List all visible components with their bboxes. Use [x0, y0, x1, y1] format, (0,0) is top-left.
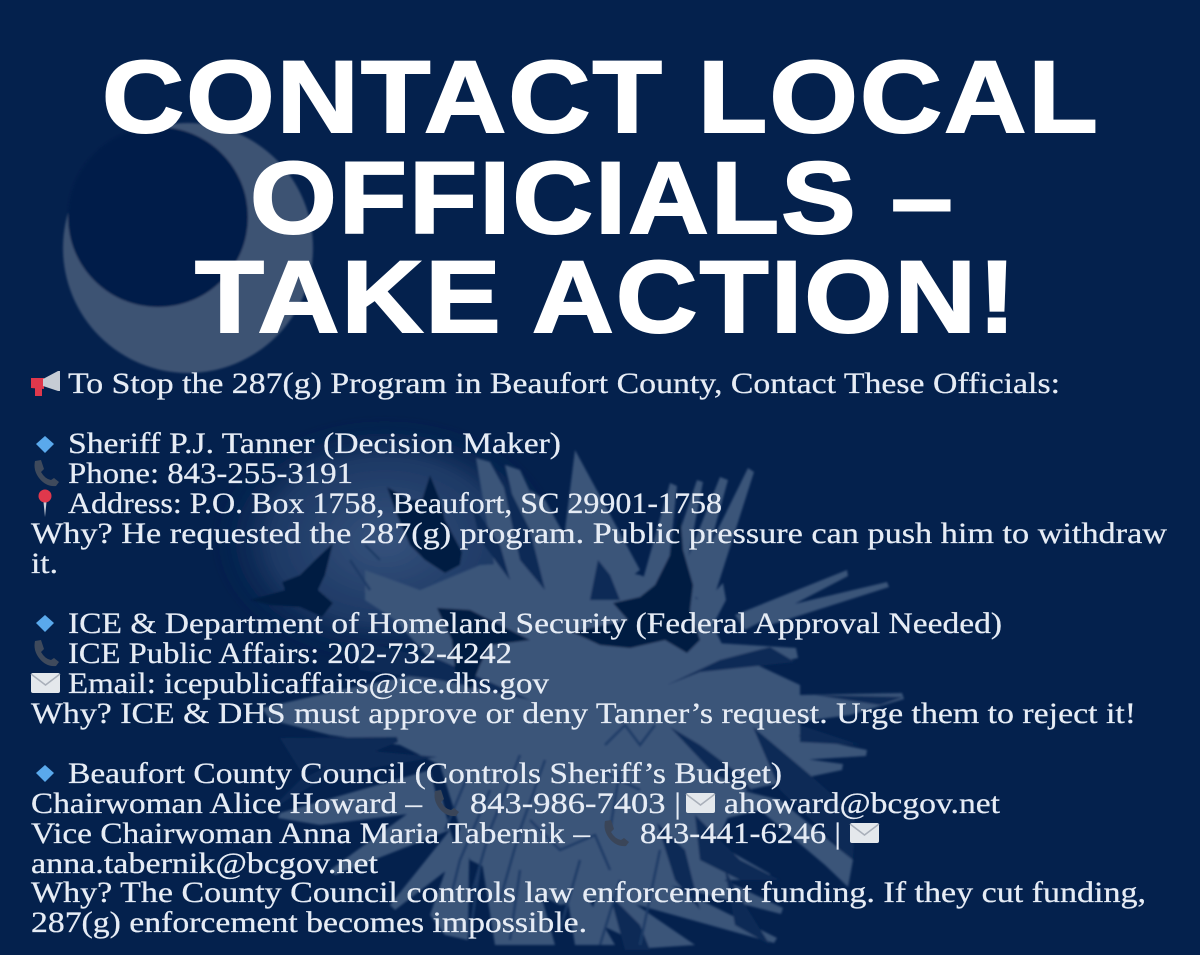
- email line: Email: icepublicaffairs@ice.dhs.gov: [68, 667, 549, 700]
- icon: phone: [434, 790, 459, 816]
- icon: blue diamond: [36, 615, 54, 632]
- panel: ICE and DHS: [31, 607, 1136, 730]
- icon: megaphone: [31, 371, 60, 396]
- icon: phone: [34, 640, 59, 666]
- chairwoman email: ahoward@bcgov.net: [724, 787, 1001, 820]
- icon: location pin: [38, 490, 52, 517]
- title: [102, 40, 1100, 354]
- crescent moon: [63, 123, 313, 373]
- ICE phone line: ICE Public Affairs: 202-732-4242: [68, 637, 512, 670]
- title line 2: OFFICIALS –: [250, 141, 955, 255]
- thin trunk lines: [350, 545, 660, 945]
- council heading: Beaufort County Council (Controls Sheriff’s Budget): [68, 757, 782, 790]
- chairwoman name: Chairwoman Alice Howard –: [31, 787, 423, 820]
- intro line: [31, 367, 1060, 400]
- vice chairwoman name: Vice Chairwoman Anna Maria Tabernik –: [31, 817, 591, 850]
- why line: Why? He requested the 287(g) program. Public pressure can push him to withdraw: [31, 517, 1167, 550]
- chairwoman phone: 843-986-7403 |: [470, 787, 681, 820]
- icon: envelope: [686, 793, 715, 813]
- why line continued: it.: [31, 547, 58, 580]
- panel: sheriff: [31, 427, 1167, 580]
- why line continued: 287(g) enforcement becomes impossible.: [31, 906, 587, 939]
- birds: [250, 475, 700, 690]
- icon: blue diamond: [36, 436, 54, 453]
- icon: phone: [34, 460, 59, 486]
- phone line: Phone: 843-255-3191: [68, 457, 353, 490]
- icon: blue diamond: [36, 765, 54, 782]
- icon: envelope: [850, 823, 879, 843]
- address line: Address: P.O. Box 1758, Beaufort, SC 29901-1758: [68, 487, 722, 520]
- vice chairwoman email: anna.tabernik@bcgov.net: [31, 847, 379, 880]
- icon: envelope: [31, 673, 60, 693]
- title line 1: CONTACT LOCAL: [102, 40, 1100, 154]
- panel: county council: [31, 757, 1146, 939]
- intro text: To Stop the 287(g) Program in Beaufort County, Contact These Officials:: [68, 367, 1060, 400]
- icon: phone: [604, 820, 629, 846]
- vice chairwoman phone: 843-441-6246 |: [640, 817, 841, 850]
- title line 3: TAKE ACTION!: [195, 240, 1018, 354]
- ICE heading: ICE & Department of Homeland Security (Federal Approval Needed): [68, 607, 1002, 640]
- sheriff heading: Sheriff P.J. Tanner (Decision Maker): [68, 427, 561, 460]
- palmetto tree with birds: [210, 415, 904, 950]
- dark gaps between fronds: [270, 470, 903, 950]
- why line: Why? ICE & DHS must approve or deny Tanner’s request. Urge them to reject it!: [31, 697, 1136, 730]
- why line: Why? The County Council controls law enforcement funding. If they cut funding,: [31, 876, 1146, 909]
